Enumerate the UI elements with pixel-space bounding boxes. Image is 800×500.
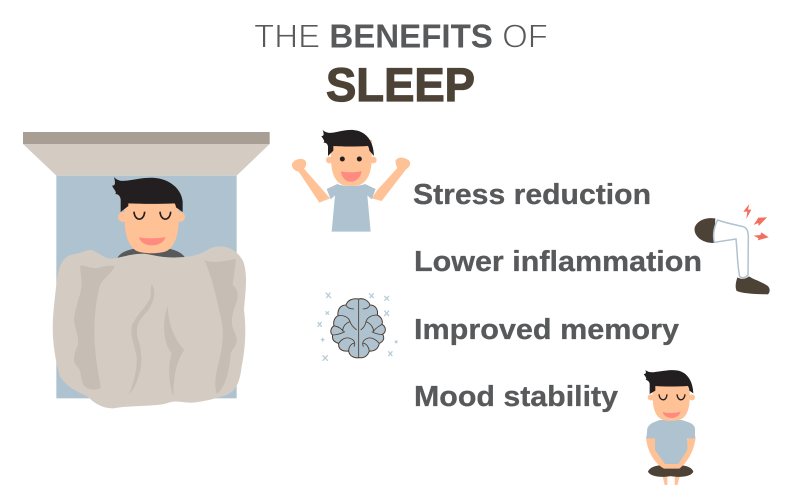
ears — [326, 157, 333, 163]
illustration: meditating man — [644, 370, 696, 485]
hair — [321, 130, 374, 156]
t-shirt — [327, 184, 376, 232]
headboard — [23, 132, 270, 144]
title line: the benefits of: THE BENEFITS OF — [254, 18, 548, 54]
hair — [644, 370, 693, 394]
benefits list — [413, 179, 702, 413]
face — [331, 140, 372, 186]
crossed legs — [648, 465, 693, 477]
leg — [714, 220, 748, 278]
shoulders — [117, 248, 185, 262]
benefit: lower inflammation: Lower inflammation — [414, 246, 702, 278]
sparkles — [318, 293, 397, 360]
ear right — [370, 157, 377, 163]
mouth — [663, 412, 681, 418]
eye right — [357, 156, 362, 161]
brain — [331, 299, 385, 358]
brain folds — [333, 299, 383, 358]
illustration: happy man with raised arms — [292, 130, 410, 232]
open mouth — [341, 171, 361, 182]
blanket folds — [74, 259, 238, 397]
title line: sleep: SLEEP — [326, 58, 475, 111]
hair — [112, 177, 183, 212]
right arm — [372, 158, 410, 201]
bed top — [23, 144, 270, 176]
ear right — [175, 212, 185, 222]
ears — [648, 394, 654, 400]
illustration: man sleeping in bed — [23, 132, 270, 408]
face — [124, 195, 179, 253]
benefit: mood stability: Mood stability — [414, 381, 618, 413]
pain sparks — [743, 204, 769, 240]
benefit: improved memory: Improved memory — [414, 314, 679, 346]
mouth — [139, 237, 165, 245]
eyes — [340, 156, 345, 161]
closed eyes — [134, 212, 171, 219]
t-shirt — [646, 420, 695, 464]
mattress — [56, 176, 237, 398]
arms — [646, 437, 696, 469]
left arm — [292, 159, 330, 203]
benefit: stress reduction: Stress reduction — [413, 179, 651, 211]
blanket — [53, 246, 246, 408]
title — [254, 18, 548, 111]
face — [652, 380, 690, 421]
stool — [662, 473, 681, 485]
illustration: brain with sparkles — [318, 293, 397, 360]
thigh stump — [695, 218, 715, 243]
ear right — [689, 394, 695, 400]
shoe — [736, 276, 770, 294]
closed eyes — [659, 394, 685, 400]
ears — [118, 212, 128, 222]
illustration: leg with sore knee — [695, 204, 770, 294]
